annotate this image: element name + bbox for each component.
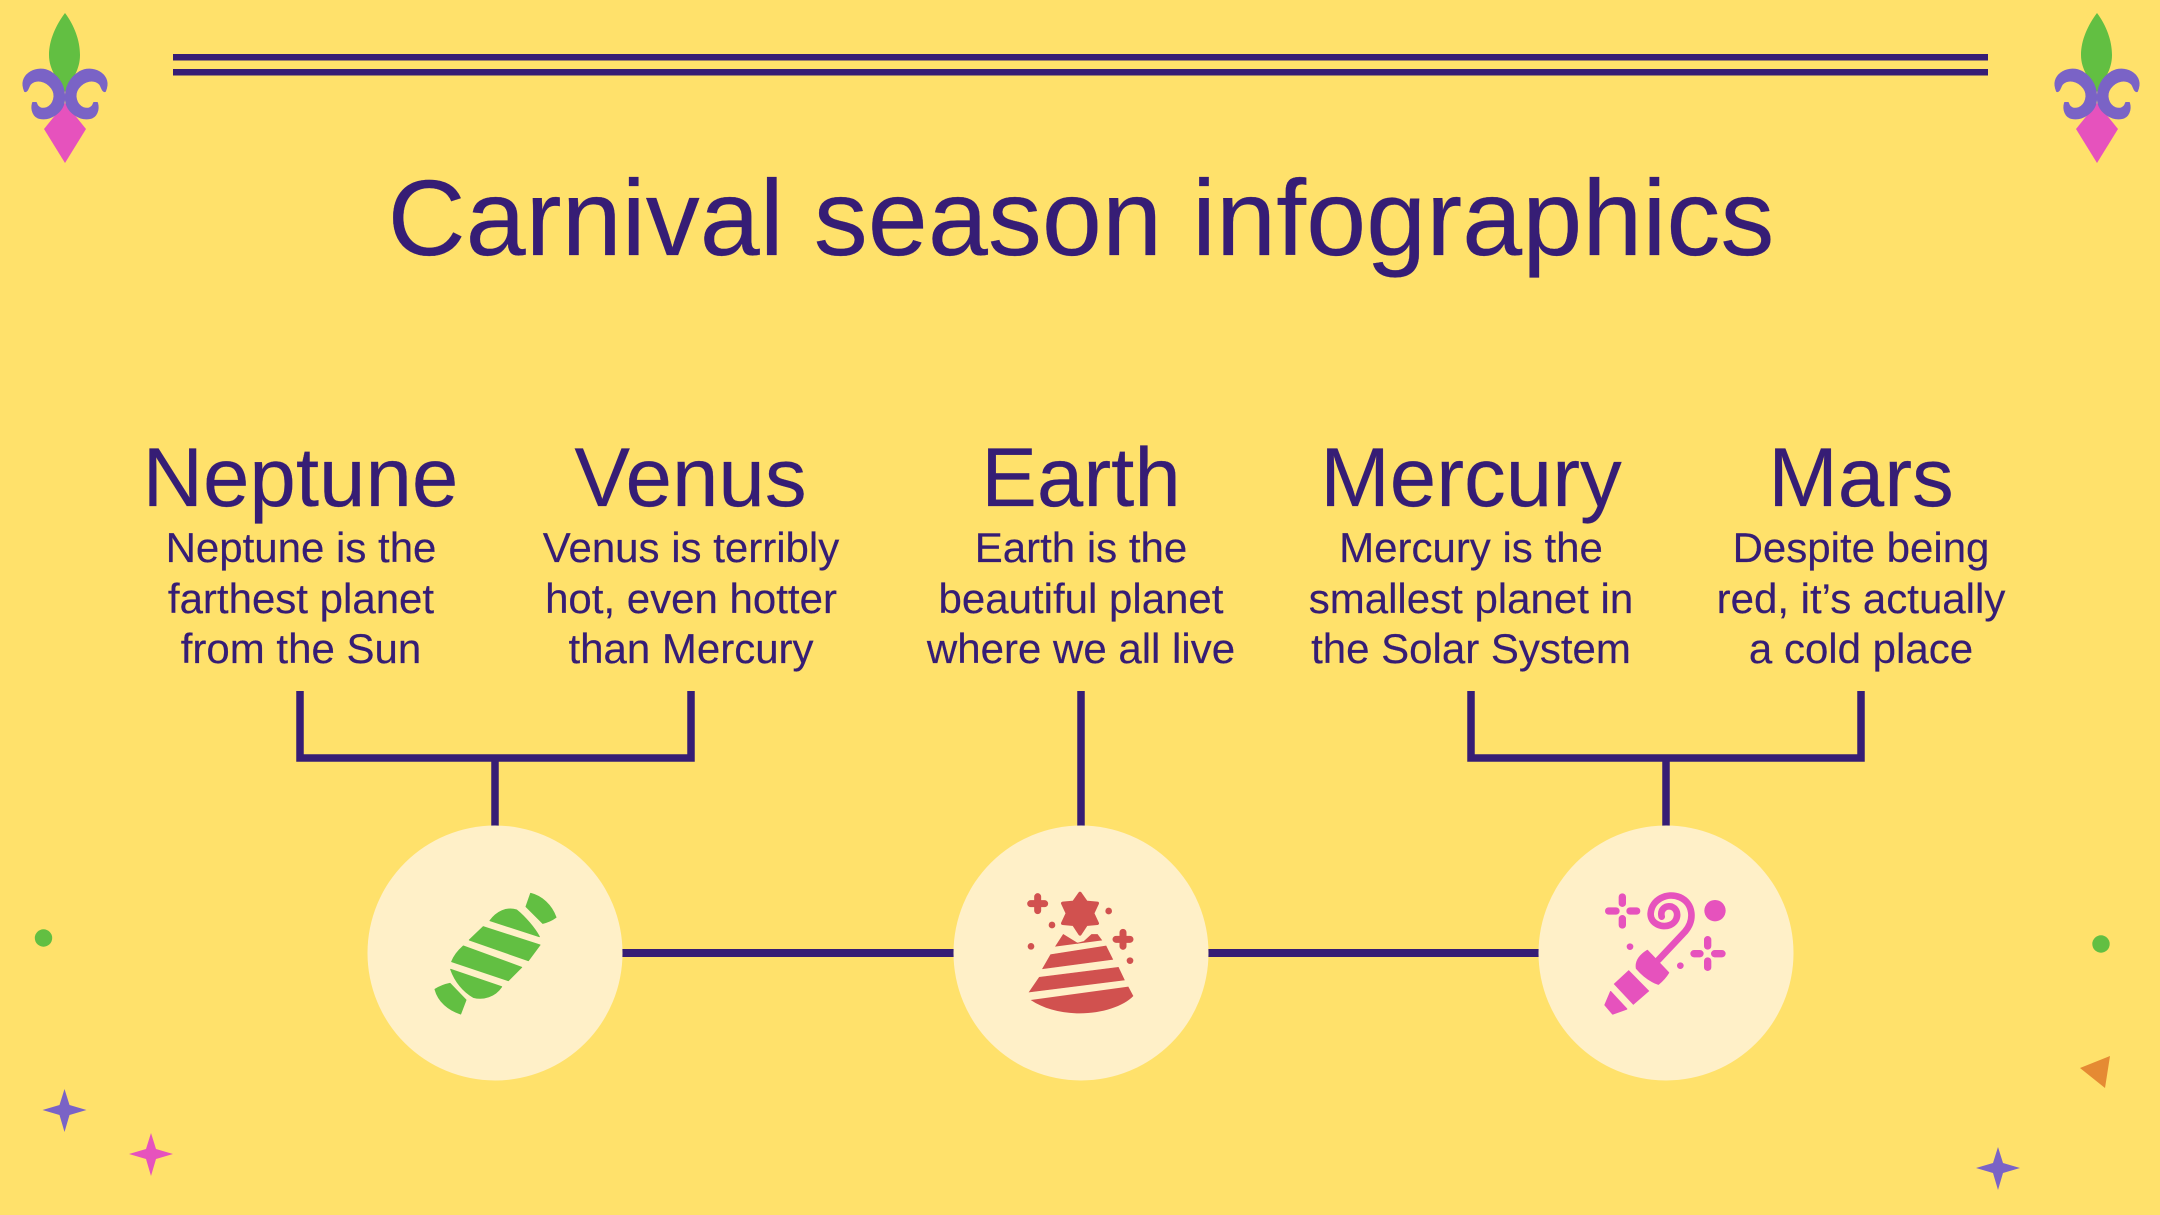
column: Neptune xyxy=(143,430,458,672)
decoration: pink star xyxy=(129,1133,173,1176)
column: Earth xyxy=(926,430,1235,672)
connector: right bracket xyxy=(1471,691,1861,828)
connector: left bracket xyxy=(300,691,691,828)
column: Venus: Venus xyxy=(574,430,807,524)
circle: party popper xyxy=(1538,826,1794,1080)
column: Earth: Earth xyxy=(981,430,1181,524)
column: Mercury: smallest planet in xyxy=(1309,575,1633,622)
icon: fleur-de-lis left xyxy=(23,13,107,163)
column: Mars: a cold place xyxy=(1749,625,1973,672)
column: Mercury: the Solar System xyxy=(1311,625,1631,672)
column: Earth: where we all live xyxy=(926,625,1235,672)
column: Venus: Venus is terribly xyxy=(543,524,839,571)
decoration: purple star left xyxy=(42,1089,86,1132)
column: Neptune: farthest planet xyxy=(168,575,434,622)
decoration: green dot right xyxy=(2092,935,2110,953)
icon: party popper xyxy=(1605,896,1726,1014)
connector: center line xyxy=(1077,691,1085,828)
column: Mercury: Mercury is the xyxy=(1339,524,1603,571)
column: Mars: Despite being xyxy=(1733,524,1989,571)
column: Neptune: Neptune is the xyxy=(166,524,436,571)
decoration: green dot left xyxy=(35,929,52,947)
column: Earth: Earth is the xyxy=(975,524,1187,571)
column: Mars xyxy=(1717,430,2005,672)
column: Mars: red, it’s actually xyxy=(1717,575,2005,622)
connector: horizontal timeline xyxy=(620,949,1540,957)
decoration: purple star right xyxy=(1976,1147,2020,1190)
icon: fleur-de-lis right xyxy=(2055,13,2139,163)
column: Mercury: Mercury xyxy=(1320,430,1622,524)
column: Venus: hot, even hotter xyxy=(545,575,837,622)
circle: party hat xyxy=(954,826,1208,1080)
decoration: orange triangle xyxy=(2080,1056,2110,1088)
column: Mercury xyxy=(1309,430,1633,672)
top double rule xyxy=(173,54,1988,76)
column: Venus xyxy=(543,430,839,672)
column: Mars: Mars xyxy=(1768,430,1954,524)
column: Venus: than Mercury xyxy=(568,625,814,672)
column: Neptune: Neptune xyxy=(143,430,458,524)
icon: party hat xyxy=(1028,893,1133,1013)
title: Carnival season infographics xyxy=(388,157,1774,278)
circle: candy xyxy=(368,826,622,1080)
column: Earth: beautiful planet xyxy=(939,575,1224,622)
icon: candy xyxy=(435,893,556,1014)
column: Neptune: from the Sun xyxy=(181,625,421,672)
